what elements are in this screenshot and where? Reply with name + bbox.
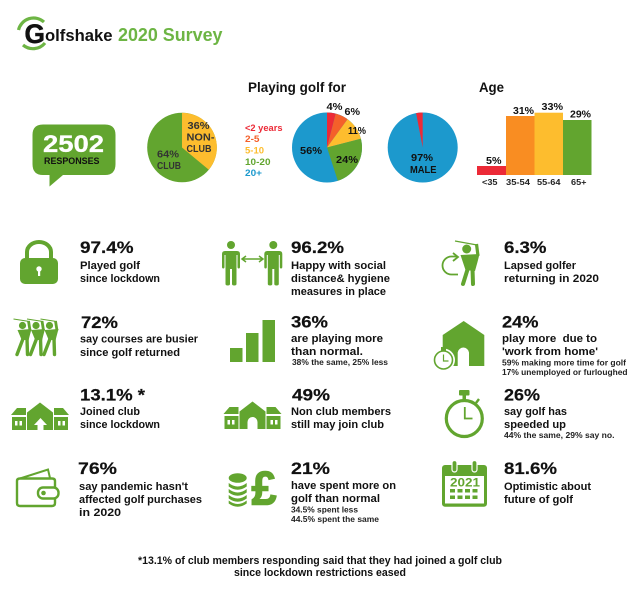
stat: non club members: 49% [292, 386, 330, 404]
stat: lapsed golfer: 6.3% [504, 238, 546, 257]
pie chart: club membership: NON- [186, 132, 215, 144]
pie chart: playing golf for: 24% [336, 154, 359, 166]
stat: courses busier [80, 313, 199, 359]
stat: work from home: 24% [502, 312, 538, 332]
stat: playing more: than normal. [291, 346, 363, 358]
stat: playing more [291, 312, 389, 367]
icon: coins and pound [229, 462, 276, 514]
pie chart: club membership: 64% [157, 148, 180, 160]
stat: golf speeded up: say golf has [504, 406, 567, 418]
logo and title: olfshake [45, 26, 112, 45]
stat: played golf: since lockdown [80, 273, 160, 285]
stat: optimistic: future of golf [504, 494, 573, 506]
bar chart: age: <35 [482, 178, 498, 187]
bar chart: age: 65+ [571, 178, 587, 187]
stat: joined club: Joined club [80, 406, 140, 418]
footnote [138, 555, 502, 579]
stat: social distance: distance& hygiene [291, 273, 390, 285]
stat: courses busier: 72% [81, 313, 118, 332]
icon: clubhouse with arrow [11, 402, 69, 430]
stat: playing more: are playing more [291, 333, 383, 345]
legend: years playing [245, 123, 282, 178]
stat: non club members [291, 386, 391, 431]
icon: social distancing people [222, 241, 282, 286]
bar chart: age: 29% [570, 108, 592, 120]
stat: played golf: Played golf [80, 260, 140, 272]
icon: three golfers [14, 319, 58, 354]
stat: playing more: 36% [291, 312, 328, 332]
icon: clubhouse with door [224, 402, 282, 430]
legend: years playing: 20+ [245, 168, 262, 178]
icon: 2021 calendar [442, 460, 487, 507]
stat: golf speeded up: 44% the same, 29% say no. [504, 431, 614, 440]
stat: work from home: 17% unemployed or furloughed [502, 368, 628, 377]
stat: golf speeded up: 26% [504, 386, 540, 404]
legend: years playing: <2 years [245, 123, 282, 133]
icon: padlock [20, 242, 58, 284]
stat: spent more: 44.5% spent the same [291, 515, 380, 524]
footnote: since lockdown restrictions eased [234, 567, 406, 579]
callout: 2502 responses [32, 124, 116, 186]
stat: spent more: 21% [291, 459, 330, 478]
stat: courses busier: say courses are busier [80, 334, 199, 346]
icon: stopwatch [446, 390, 482, 436]
logo and title: 2020 Survey [118, 24, 223, 45]
stat: joined club: since lockdown [80, 419, 160, 431]
legend: years playing: 2-5 [245, 134, 260, 144]
pie chart: club membership: CLUB [157, 160, 181, 172]
stat: work from home: 'work from home' [502, 346, 598, 358]
stat: spent more [291, 459, 396, 524]
stat: optimistic: 81.6% [504, 459, 557, 478]
stat: non club members: still may join club [291, 419, 384, 431]
legend: years playing: 5-10 [245, 146, 264, 156]
stat: work from home [502, 312, 628, 377]
bar chart: age: 55-64 [537, 178, 561, 187]
callout: 2502 responses: RESPONSES [44, 156, 100, 166]
pie chart: male share [388, 112, 458, 182]
stat: purchases: 76% [78, 459, 117, 478]
heading: playing golf for: Playing golf for [248, 80, 347, 95]
stat: social distance: 96.2% [291, 238, 344, 257]
bar chart: age: 31% [513, 105, 535, 117]
stat: spent more: 34.5% spent less [291, 506, 359, 514]
stat: played golf [80, 238, 160, 285]
pie chart: male share: MALE [410, 164, 436, 176]
logo and title: G [24, 19, 45, 49]
stat: lapsed golfer: Lapsed golfer [504, 260, 577, 272]
stat: optimistic [504, 459, 591, 506]
bar chart: age: 33% [542, 101, 564, 113]
heading: age: Age [479, 80, 504, 95]
legend: years playing: 10-20 [245, 157, 270, 167]
icon: rising bars [230, 320, 275, 362]
pie chart: male share: 97% [411, 152, 434, 164]
pie chart: playing golf for [292, 101, 367, 182]
pie chart: club membership: 36% [188, 120, 210, 132]
stat: lapsed golfer [504, 238, 599, 285]
stat: work from home: 59% making more time for golf [502, 358, 626, 368]
stat: joined club: 13.1% * [80, 386, 145, 404]
stat: played golf: 97.4% [80, 238, 134, 257]
stat: golf speeded up [504, 386, 614, 440]
callout: 2502 responses: 2502 [43, 131, 104, 158]
stat: optimistic: Optimistic about [504, 481, 591, 493]
icon: house and stopwatch [432, 321, 484, 372]
pie chart: club membership: CLUB [186, 143, 212, 155]
pie chart: playing golf for: 11% [348, 125, 367, 137]
stat: spent more: golf than normal [291, 493, 380, 505]
icon: wallet [17, 470, 58, 506]
stat: social distance: measures in place [291, 286, 386, 298]
stat: courses busier: since golf returned [80, 347, 180, 359]
stat: spent more: have spent more on [291, 480, 396, 492]
stat: purchases [78, 459, 202, 519]
stat: playing more: 38% the same, 25% less [292, 358, 389, 367]
icon: 2021 calendar: 2021 [450, 476, 480, 490]
stat: non club members: Non club members [291, 406, 391, 418]
stat: purchases: affected golf purchases [79, 494, 202, 506]
stat: golf speeded up: speeded up [504, 419, 566, 431]
stat: purchases: say pandemic hasn't [79, 481, 188, 493]
icon: coins and pound: £ [252, 462, 276, 514]
bar chart: age: 5% [486, 155, 502, 167]
footnote: *13.1% of club members responding said that they had joined a golf club [138, 555, 502, 567]
pie chart: playing golf for: 6% [344, 106, 361, 118]
stat: lapsed golfer: returning in 2020 [504, 273, 599, 285]
stat: social distance: Happy with social [291, 260, 386, 272]
stat: social distance [291, 238, 390, 298]
bar chart: age [477, 101, 592, 187]
pie chart: playing golf for: 56% [300, 145, 323, 157]
stat: purchases: in 2020 [79, 507, 121, 519]
pie chart: playing golf for: 4% [326, 101, 343, 113]
icon: lapsed golfer returning [442, 241, 480, 284]
logo and title [18, 18, 223, 49]
bar chart: age: 35-54 [506, 178, 531, 187]
pie chart: club membership [147, 113, 217, 182]
stat: work from home: play more due to [502, 333, 597, 345]
stat: joined club [80, 386, 160, 431]
